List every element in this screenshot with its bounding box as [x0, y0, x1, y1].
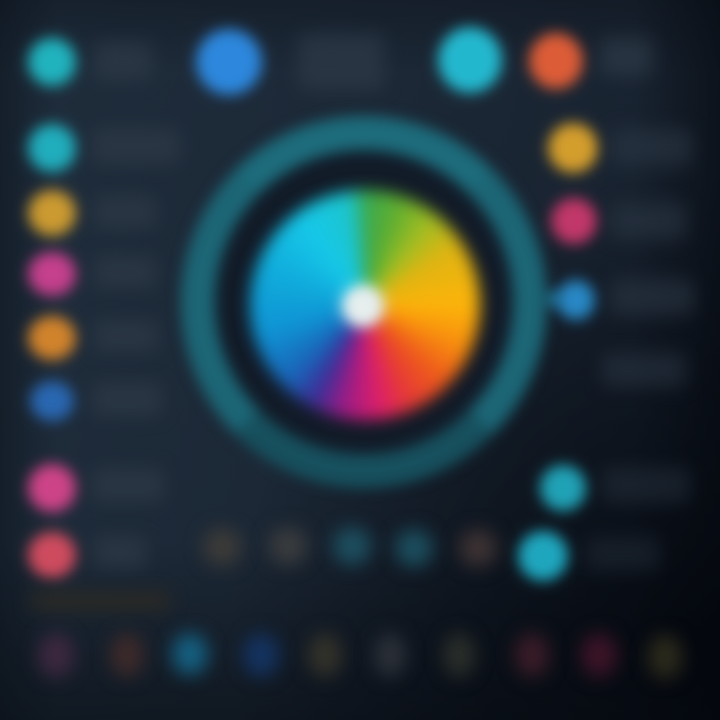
- icon: dark red item: [515, 633, 549, 677]
- label: right item 3: [610, 279, 694, 315]
- icon: grey-olive item: [443, 633, 475, 677]
- icon: cyan dot large: [518, 531, 568, 581]
- icon: crimson dot: [551, 198, 597, 244]
- icon: orange-red circle: [529, 33, 583, 89]
- label: right item 5: [602, 467, 690, 503]
- heading: bottom section: [30, 592, 170, 610]
- label: item 4: [94, 256, 156, 288]
- icon: teal dot 1: [28, 38, 76, 86]
- label: top item 1: [298, 34, 384, 90]
- chart: ring and colour wheel: [174, 108, 564, 494]
- icon: cyan dot: [540, 465, 586, 511]
- icon: crimson item: [581, 633, 617, 677]
- icon: dark olive item: [648, 635, 682, 679]
- label: item 8: [94, 536, 146, 568]
- label: item 3: [94, 196, 156, 228]
- panel: right column of items: [508, 112, 697, 591]
- icon: coral dot: [28, 532, 76, 578]
- icon: yellow dot: [548, 123, 598, 173]
- panel: left column of items: [18, 28, 174, 588]
- label: right item 2: [610, 203, 686, 239]
- icon: faint brown dot 2: [459, 529, 497, 567]
- label: right item 4: [602, 353, 686, 387]
- icon: faint teal dot: [333, 527, 371, 565]
- pie: white centre: [343, 286, 383, 326]
- panel: top items: [186, 17, 654, 106]
- ring: teal outer ring: [181, 116, 547, 488]
- icon: magenta dot: [28, 464, 76, 512]
- connector: ring to blue dot: [542, 291, 566, 307]
- icon: dark blue item: [243, 633, 279, 677]
- panel: bottom row of faint items: [32, 624, 688, 684]
- label: item 5: [94, 320, 158, 352]
- icon: olive item: [308, 633, 342, 677]
- label: right item 1: [610, 129, 692, 165]
- icon: blue dot: [557, 280, 595, 320]
- label: item 1: [94, 42, 152, 80]
- panel: middle row of faint dots: [199, 520, 503, 574]
- label: right item 6: [586, 537, 660, 571]
- label: item 7: [92, 468, 164, 502]
- icon: teal dot 2: [28, 124, 76, 172]
- pie: colour wheel: [250, 190, 480, 420]
- icon: pink dot: [28, 252, 76, 296]
- icon: cyan circle: [438, 27, 502, 93]
- icon: orange dot: [28, 316, 76, 360]
- icon: faint grey dot: [269, 527, 307, 565]
- icon: amber dot: [28, 190, 76, 236]
- icon: faint teal dot 2: [395, 529, 433, 567]
- icon: teal-blue item: [172, 633, 208, 675]
- icon: grey item: [374, 633, 406, 677]
- icon: blue dot: [30, 381, 74, 421]
- label: item 6: [92, 382, 162, 416]
- icon: brown item: [110, 633, 144, 677]
- label: item 2: [92, 128, 180, 164]
- icon: blue circle: [196, 29, 262, 95]
- icon: faint brown dot: [203, 528, 241, 566]
- label: top item 2: [600, 38, 652, 76]
- icon: maroon item: [38, 633, 74, 677]
